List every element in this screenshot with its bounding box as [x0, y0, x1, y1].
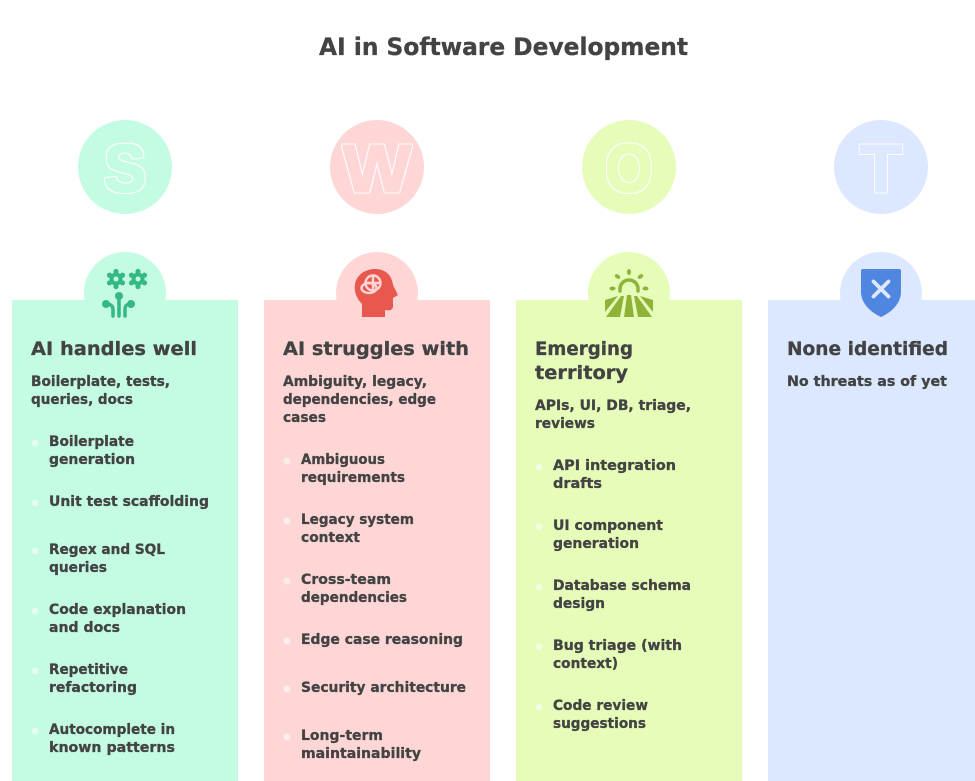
- icon: shield with cross: [861, 269, 901, 317]
- list: opportunities: Database schema: [553, 578, 691, 594]
- list: strengths: [32, 434, 209, 756]
- list: strengths: Boilerplate: [49, 434, 134, 450]
- list: weaknesses: Cross-team: [301, 572, 391, 588]
- list: opportunities: generation: [553, 536, 639, 552]
- list: opportunities: drafts: [553, 476, 602, 492]
- list: weaknesses: [284, 452, 466, 762]
- panel: strengths: [12, 252, 238, 781]
- summary: weaknesses: [283, 374, 436, 426]
- summary: opportunities: reviews: [535, 416, 595, 432]
- heading: opportunities: [535, 338, 633, 384]
- list: weaknesses: Legacy system: [301, 512, 414, 528]
- summary: weaknesses: Ambiguity, legacy,: [283, 374, 427, 390]
- list: weaknesses: Edge case reasoning: [301, 632, 463, 648]
- badge: T: T: [860, 132, 902, 206]
- summary: strengths: Boilerplate, tests,: [31, 374, 170, 390]
- panel: threats: [768, 252, 975, 781]
- list: opportunities: UI component: [553, 518, 663, 534]
- list: strengths: Code explanation: [49, 602, 186, 618]
- badge: O: O: [606, 132, 652, 206]
- heading: opportunities: Emerging: [535, 338, 633, 360]
- summary: strengths: [31, 374, 170, 408]
- summary: threats: No threats as of yet: [787, 374, 947, 390]
- icon: sun over field: [605, 269, 653, 317]
- list: opportunities: design: [553, 596, 605, 612]
- badge: S: S: [104, 132, 146, 206]
- badge: W: W: [343, 132, 412, 206]
- list: opportunities: suggestions: [553, 716, 646, 732]
- list: strengths: known patterns: [49, 740, 175, 756]
- list: strengths: generation: [49, 452, 135, 468]
- summary: weaknesses: cases: [283, 410, 326, 426]
- heading: threats: None identified: [787, 338, 948, 360]
- list: weaknesses: dependencies: [301, 590, 407, 606]
- badge: S: [78, 120, 172, 214]
- summary: opportunities: APIs, UI, DB, triage,: [535, 398, 691, 414]
- panel: weaknesses: [264, 252, 490, 781]
- badge: W: [330, 120, 424, 214]
- list: weaknesses: Ambiguous: [301, 452, 385, 468]
- list: strengths: refactoring: [49, 680, 137, 696]
- list: weaknesses: maintainability: [301, 746, 421, 762]
- list: opportunities: context): [553, 656, 618, 672]
- icon: flowers: [102, 269, 147, 316]
- list: weaknesses: Long-term: [301, 728, 383, 744]
- title: AI in Software Development: [319, 33, 688, 61]
- list: strengths: Repetitive: [49, 662, 128, 678]
- list: strengths: Regex and SQL: [49, 542, 165, 558]
- list: opportunities: Code review: [553, 698, 648, 714]
- badge: O: [582, 120, 676, 214]
- summary: weaknesses: dependencies, edge: [283, 392, 436, 408]
- list: strengths: Unit test scaffolding: [49, 494, 209, 510]
- heading: opportunities: territory: [535, 362, 629, 384]
- list: opportunities: API integration: [553, 458, 676, 474]
- heading: weaknesses: AI struggles with: [283, 338, 469, 360]
- list: opportunities: Bug triage (with: [553, 638, 682, 654]
- list: weaknesses: context: [301, 530, 360, 546]
- list: strengths: queries: [49, 560, 107, 576]
- list: weaknesses: Security architecture: [301, 680, 466, 696]
- list: strengths: Autocomplete in: [49, 722, 175, 738]
- list: weaknesses: requirements: [301, 470, 405, 486]
- summary: opportunities: [535, 398, 691, 432]
- heading: strengths: AI handles well: [31, 338, 197, 360]
- summary: strengths: queries, docs: [31, 392, 133, 408]
- list: strengths: and docs: [49, 620, 120, 636]
- panel: opportunities: [516, 252, 742, 781]
- icon: head with brain: [355, 269, 398, 317]
- badge: T: [834, 120, 928, 214]
- list: opportunities: [536, 458, 691, 732]
